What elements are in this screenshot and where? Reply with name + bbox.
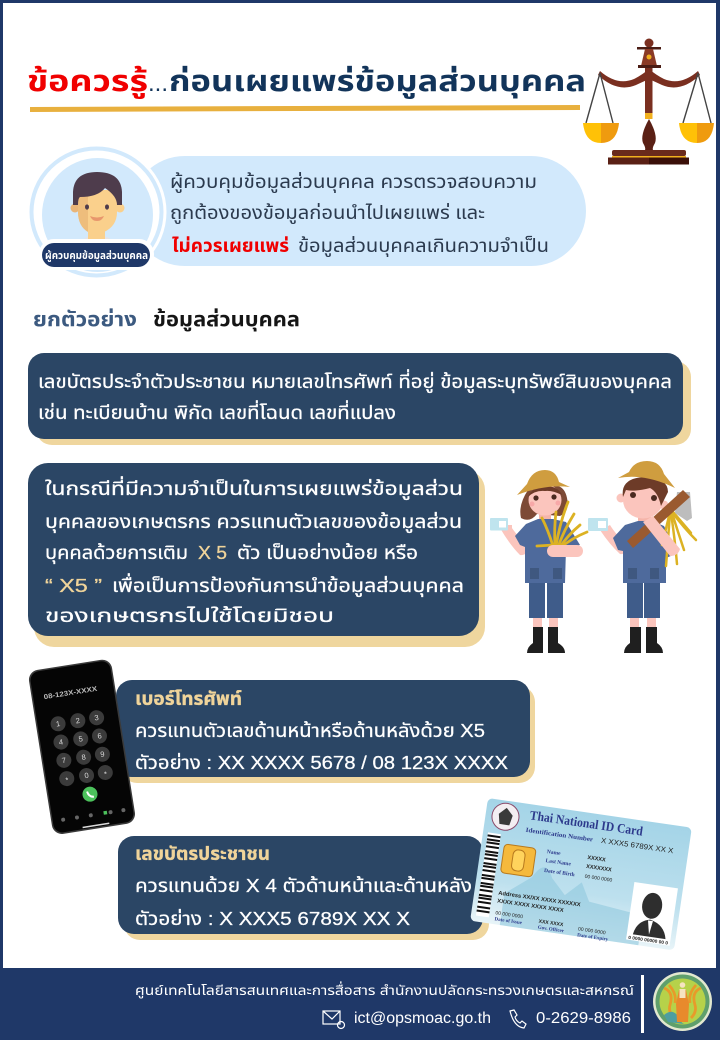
icon: scales of justice [583,38,714,164]
footer [0,968,720,1040]
title: ... [148,70,168,97]
title [27,66,586,99]
icon: phone [510,1010,526,1028]
panel: masking guidance: ในกรณีที่มีความจำเป็นในการเผยแพร่ข้อมูลส่วน [45,476,463,501]
panel: masking guidance: “ X5 ” [45,575,102,596]
title underline [30,105,580,112]
text: controller guidance [170,170,549,258]
title: ข้อควรรู้ [27,66,148,99]
text: controller guidance: ผู้ควบคุมข้อมูลส่วนบุคคล ควรตรวจสอบความ [170,170,537,194]
icon: Thai national ID card: 00 000 0000 [584,874,613,884]
icon: Thai national ID card [470,798,692,952]
panel: masking guidance: ตัว เป็นอย่างน้อย หรือ [237,542,418,563]
panel: national ID number: ตัวอย่าง : X XXX5 6789X XX X [135,908,410,929]
icon: Thai national ID card: X XXX5 6789X XX X [600,836,674,855]
icon: Thai national ID card: XXXXXXX [586,864,612,874]
heading: examples: ข้อมูลส่วนบุคคล [153,308,300,332]
text: controller guidance: ถูกต้องของข้อมูลก่อนนำไปเผยแพร่ และ [170,201,485,225]
icon: smartphone: 3 [94,713,99,722]
icon: Thai national ID card: XXXXX [587,855,606,864]
icon: ministry emblem [653,972,712,1031]
icon: smartphone: 0 [84,771,89,780]
panel: masking guidance: ของเกษตรกรไปใช้โดยมิชอบ [45,605,334,626]
heading: examples [33,308,300,332]
icon: Thai national ID card: Thai National ID Card [529,807,645,839]
illustration: farmer man [588,461,696,653]
panel: phone number: ควรแทนตัวเลขด้านหน้าหรือด้านหลังด้วย X5 [135,720,485,741]
icon: Thai national ID card: Last Name [545,858,572,868]
icon: smartphone: * [103,769,108,779]
panel: personal data examples [28,353,691,445]
icon: smartphone: 6 [97,731,102,741]
panel: national ID number: ควรแทนด้วย X 4 ตัวด้านหน้าและด้านหลัง [135,875,472,896]
panel: phone number [116,680,535,783]
icon: data controller avatar [26,144,166,280]
panel: masking guidance: บุคคลของเกษตรกร ควรแทนตัวเลขของข้อมูลส่วน [45,511,462,534]
panel: masking guidance: เพื่อเป็นการป้องกันการนำข้อมูลส่วนบุคคล [112,573,464,598]
icon: Thai national ID card: Date of Issue [494,917,523,926]
icon: Thai national ID card: 00 000 0000 [578,926,606,936]
icon: smartphone: 2 [75,716,81,725]
illustration: farmer woman [490,470,587,653]
panel: masking guidance: บุคคลด้วยการเติม [45,542,188,564]
panel: phone number: เบอร์โทรศัพท์ [135,688,242,709]
icon: email [323,1011,344,1028]
icon: smartphone: 7 [61,756,67,765]
text: controller guidance: ข้อมูลส่วนบุคคลเกินความจำเป็น [298,234,549,258]
panel: national ID number: เลขบัตรประชาชน [135,843,270,864]
panel: masking guidance: X 5 [198,542,227,563]
panel: data controller speech bubble [130,156,586,266]
icon: Thai national ID card: XXX XXXX [538,919,564,928]
panel: personal data examples: เช่น ทะเบียนบ้าน พิกัด เลขที่โฉนด เลขที่แปลง [38,400,396,423]
title: ก่อนเผยแพร่ข้อมูลส่วนบุคคล [169,66,586,99]
panel: phone number: ตัวอย่าง : XX XXXX 5678 / 08 123X XXXX [135,752,508,773]
label pill: data controller: ผู้ควบคุมข้อมูลส่วนบุคคล [45,249,148,262]
icon: Thai national ID card: Identification Number [525,827,594,844]
icon: smartphone [28,658,136,835]
icon: smartphone: 4 [58,737,64,747]
icon: smartphone: 1 [55,719,61,729]
icon: Thai national ID card: Date of Expiry [577,933,609,943]
panel: personal data examples: เลขบัตรประจำตัวประชาชน หมายเลขโทรศัพท์ ที่อยู่ ข้อมูลระบุทรัพย์สินของบุคคล [38,369,672,394]
icon: Thai national ID card: XXXX XXXX XXXX XXXX [497,898,564,914]
icon: smartphone: * [65,775,69,785]
icon: smartphone: 8 [81,752,86,762]
icon: smartphone: 08-123X-XXXX [43,686,98,701]
footer: organisation name: ศูนย์เทคโนโลยีสารสนเทศและการสื่อสาร สำนักงานปลัดกระทรวงเกษตรและสหกรณ์ [135,981,634,999]
icon: smartphone: 9 [100,749,105,759]
icon: smartphone: 5 [78,734,84,744]
footer: email: ict@opsmoac.go.th [354,1010,491,1027]
icon: Thai national ID card: Name [546,849,561,857]
text: controller guidance: ไม่ควรเผยแพร่ [172,235,289,257]
icon: Thai national ID card: Date of Birth [544,868,575,878]
icon: Thai national ID card: 00 000 0000 [495,910,524,920]
heading: examples: ยกตัวอย่าง [33,308,137,331]
panel: national ID number [118,836,489,940]
footer: phone number: 0-2629-8986 [536,1010,631,1027]
icon: Thai national ID card: Gov. Officer [537,926,565,934]
icon: Thai national ID card: 0 0000 00000 00 0 [628,935,669,946]
icon: Thai national ID card: Address XX/XX XXXX XXXXXX [498,891,581,908]
panel: masking guidance [28,463,485,647]
